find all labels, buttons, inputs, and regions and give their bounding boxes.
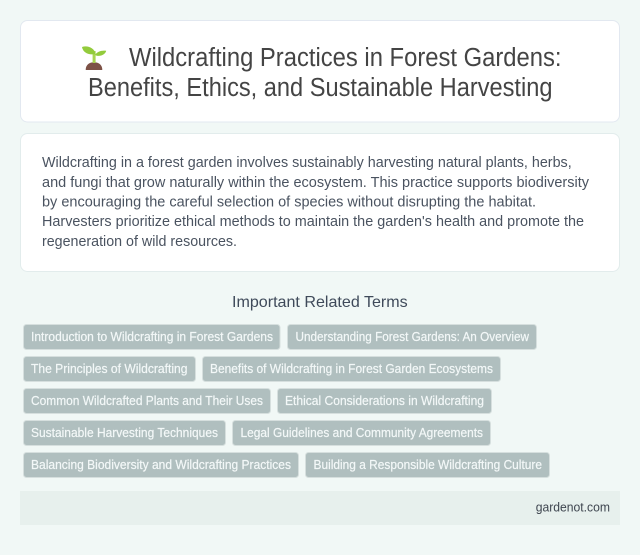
tag: balancing biodiversity: Balancing Biodiversity and Wildcrafting Practices: [31, 458, 291, 472]
title: Wildcrafting Practices in Forest Gardens:: [129, 44, 562, 72]
tag: principles: The Principles of Wildcrafting: [31, 362, 188, 376]
panel: related term tags: [24, 324, 550, 478]
text block: description: and fungi that grow naturally within the ecosystem. This practice supports biodiversity: [42, 175, 590, 191]
tag: ethical considerations: Ethical Considerations in Wildcrafting: [285, 394, 484, 408]
panel: intro description: [20, 134, 620, 272]
tag: common plants: [24, 388, 270, 414]
tag: benefits: Benefits of Wildcrafting in Forest Garden Ecosystems: [210, 362, 493, 376]
tag: responsible culture: [306, 452, 550, 478]
footer source text: gardenot.com: [536, 500, 610, 514]
icon: seedling: [82, 46, 106, 70]
tag: sustainable harvesting: Sustainable Harvesting Techniques: [31, 426, 218, 440]
tag: balancing biodiversity: [24, 452, 298, 478]
tag: ethical considerations: [278, 388, 492, 414]
title: Benefits, Ethics, and Sustainable Harvesting: [88, 74, 552, 102]
tag: responsible culture: Building a Responsible Wildcrafting Culture: [314, 458, 542, 472]
heading: related terms: Important Related Terms: [232, 294, 408, 311]
tag: principles: [24, 356, 196, 382]
text block: description: regeneration of wild resources.: [42, 234, 237, 250]
text block: description: Wildcrafting in a forest garden involves sustainably harvesting natural plants, herbs,: [42, 155, 572, 171]
title: [88, 44, 562, 102]
tag: legal guidelines: [232, 420, 490, 446]
tag: legal guidelines: Legal Guidelines and Community Agreements: [240, 426, 483, 440]
tag: introduction: Introduction to Wildcrafting in Forest Gardens: [31, 330, 273, 344]
tag: sustainable harvesting: [24, 420, 226, 446]
text block: description: by encouraging the careful selection of species without disrupting the habitat.: [42, 194, 536, 210]
tag: introduction: [24, 324, 280, 350]
tag: common plants: Common Wildcrafted Plants and Their Uses: [31, 394, 263, 408]
text block: description: Harvesters prioritize ethical methods to maintain the garden's health and promote the: [42, 214, 584, 230]
footer: [20, 491, 620, 525]
panel: title card: [20, 20, 620, 122]
tag: understanding forest gardens: Understanding Forest Gardens: An Overview: [296, 330, 530, 344]
tag: understanding forest gardens: [288, 324, 536, 350]
tag: benefits: [202, 356, 500, 382]
text block: description: [42, 155, 590, 250]
